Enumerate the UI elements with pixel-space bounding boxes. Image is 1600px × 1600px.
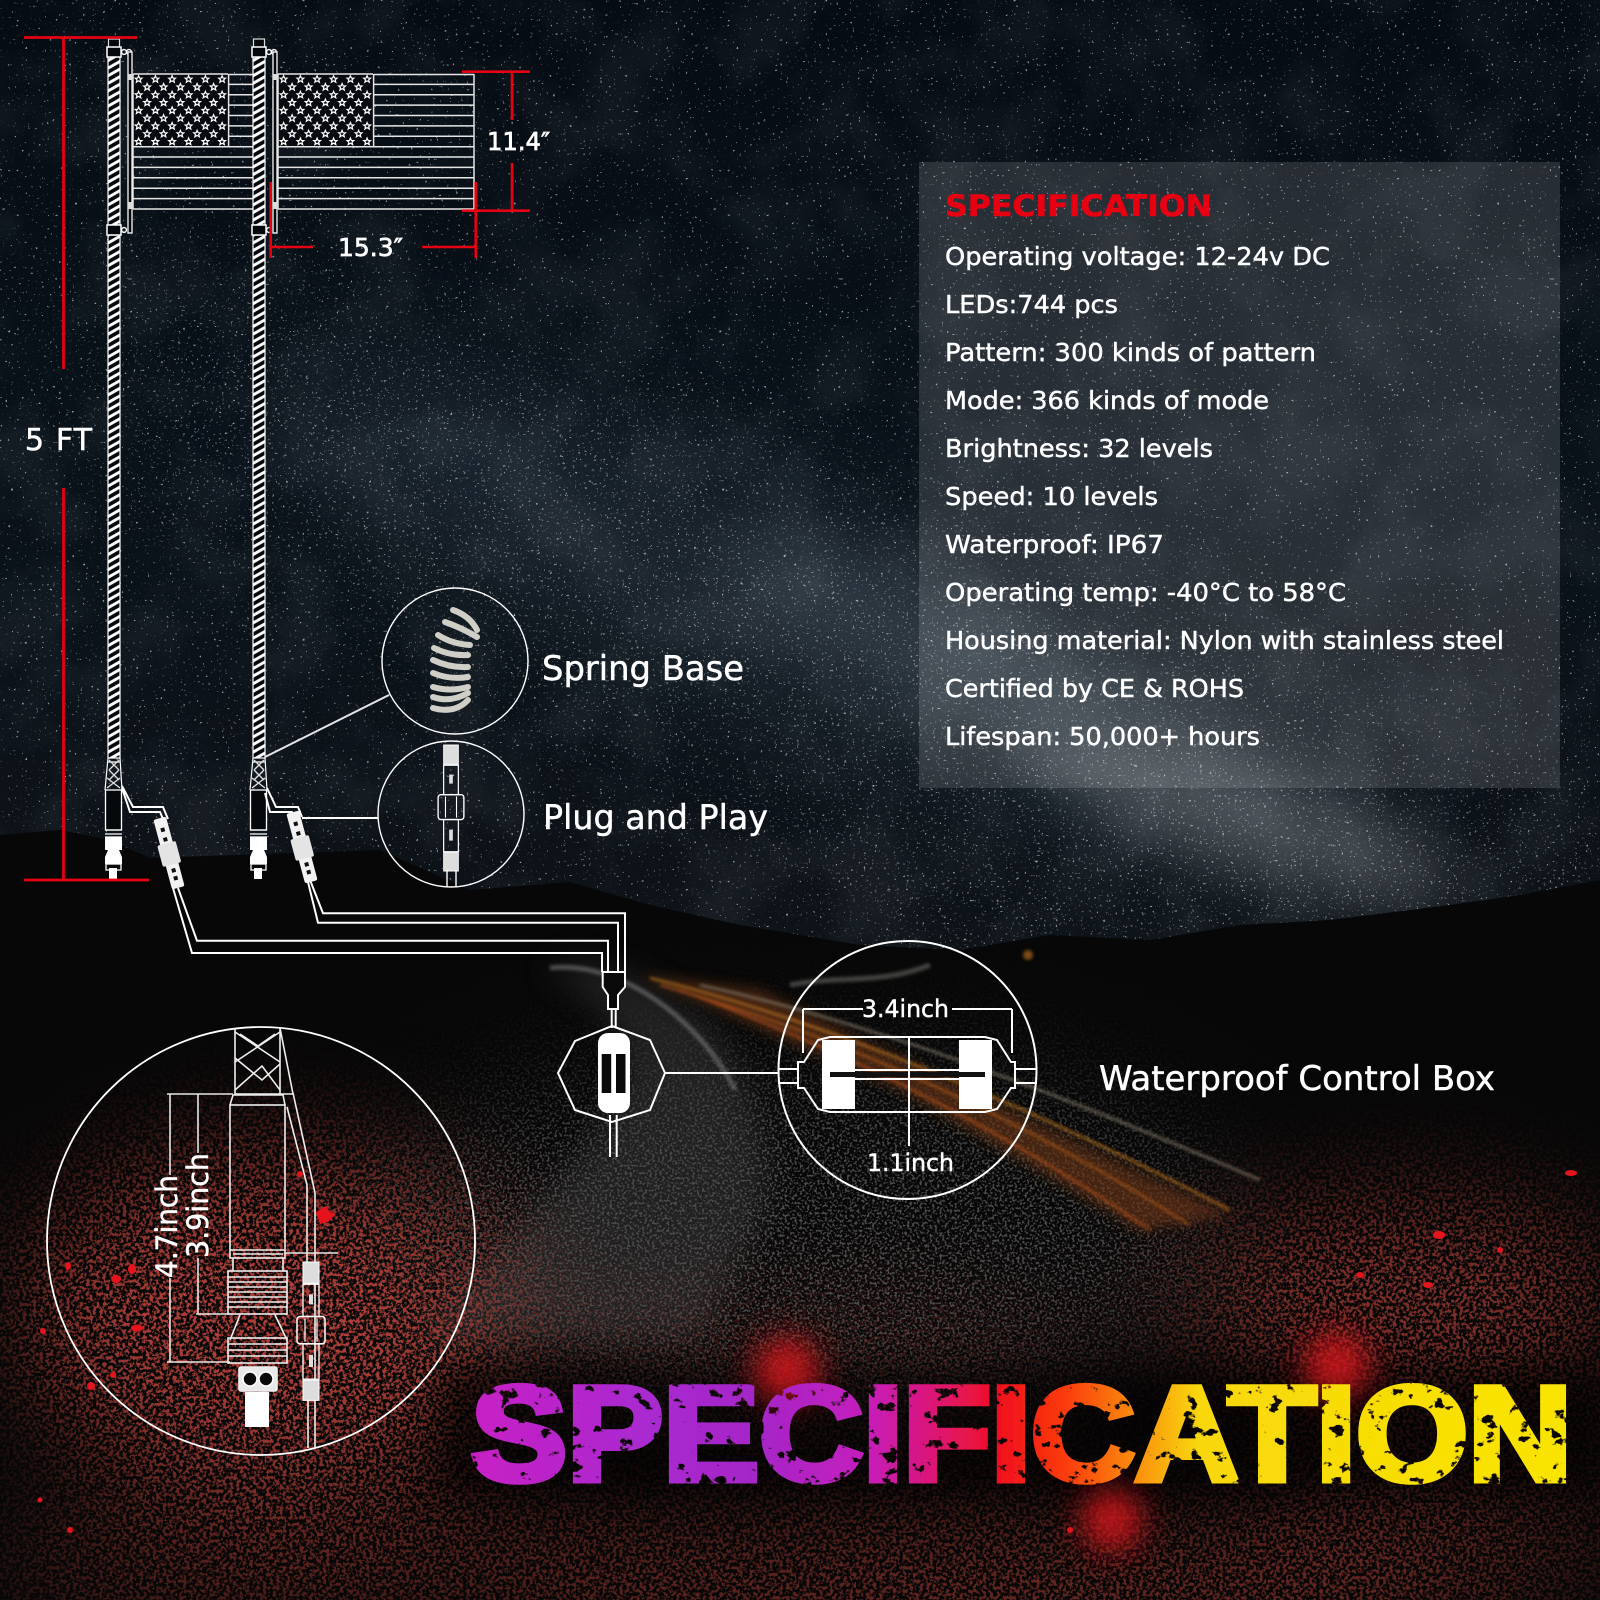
background: highway and light trails <box>300 950 1300 1450</box>
control box in wiring line <box>558 972 778 1157</box>
label: spring base: Spring Base <box>542 649 744 689</box>
specification list: LEDs:744 pcs <box>945 290 1118 319</box>
label: 11.4 inches: 11.4″ <box>487 127 550 156</box>
background: dark hills <box>0 830 1600 1600</box>
specification list: Waterproof: IP67 <box>945 530 1164 559</box>
callout: spring base <box>265 588 528 757</box>
dimension lines <box>167 1094 338 1362</box>
specification list: Pattern: 300 kinds of pattern <box>945 338 1316 367</box>
icon: plug connector <box>438 745 464 887</box>
panel: specification <box>919 162 1560 788</box>
red dimension: flag width 15.3 inches <box>271 182 476 262</box>
flag 1 <box>133 74 253 209</box>
cable and plug <box>287 1093 325 1448</box>
specification list: Mode: 366 kinds of mode <box>945 386 1269 415</box>
flag 2 <box>278 74 474 209</box>
icon: spring <box>433 610 477 710</box>
callout: control box dimensions <box>778 941 1037 1199</box>
callout: base detail with dimensions <box>47 1027 475 1455</box>
capsule drawing <box>778 1009 1037 1146</box>
label: plug and play: Plug and Play <box>543 798 768 838</box>
label: 1.1 inch: 1.1inch <box>867 1149 954 1177</box>
background: red speckled ground <box>0 1064 1600 1600</box>
whip pole 1 <box>105 39 133 879</box>
whip pole 2 <box>250 39 278 879</box>
specification list: Speed: 10 levels <box>945 482 1158 511</box>
specification list: Operating voltage: 12-24v DC <box>945 242 1330 271</box>
wiring from poles to control box <box>122 786 625 972</box>
label: 4.7 inch: 4.7inch <box>150 1175 184 1278</box>
specification list: Housing material: Nylon with stainless steel <box>945 626 1504 655</box>
title: SPECIFICATION grunge wordmark: SPECIFICATION <box>471 1360 1572 1509</box>
label: 15.3 inches: 15.3″ <box>338 233 403 262</box>
specification list: Lifespan: 50,000+ hours <box>945 722 1260 751</box>
inline connector 2 <box>284 810 320 884</box>
callout: plug and play <box>302 741 524 887</box>
panel heading: SPECIFICATION <box>945 189 1212 223</box>
specification list: Certified by CE & ROHS <box>945 674 1244 703</box>
label: 3.9 inch: 3.9inch <box>181 1153 215 1258</box>
label: 3.4 inch: 3.4inch <box>862 995 949 1023</box>
background: night sky <box>0 0 1600 1000</box>
label: 5 FT: 5 FT <box>25 423 93 458</box>
specification list: Brightness: 32 levels <box>945 434 1213 463</box>
red dimension: flag height 11.4 inches <box>462 72 550 211</box>
red dimension: 5 FT height <box>24 37 149 880</box>
specification list: Operating temp: -40°C to 58°C <box>945 578 1346 607</box>
pole base drawing <box>228 1028 293 1427</box>
label: waterproof control box: Waterproof Control Box <box>1099 1059 1495 1099</box>
inline connector 1 <box>151 816 187 890</box>
specification list <box>945 242 1504 751</box>
